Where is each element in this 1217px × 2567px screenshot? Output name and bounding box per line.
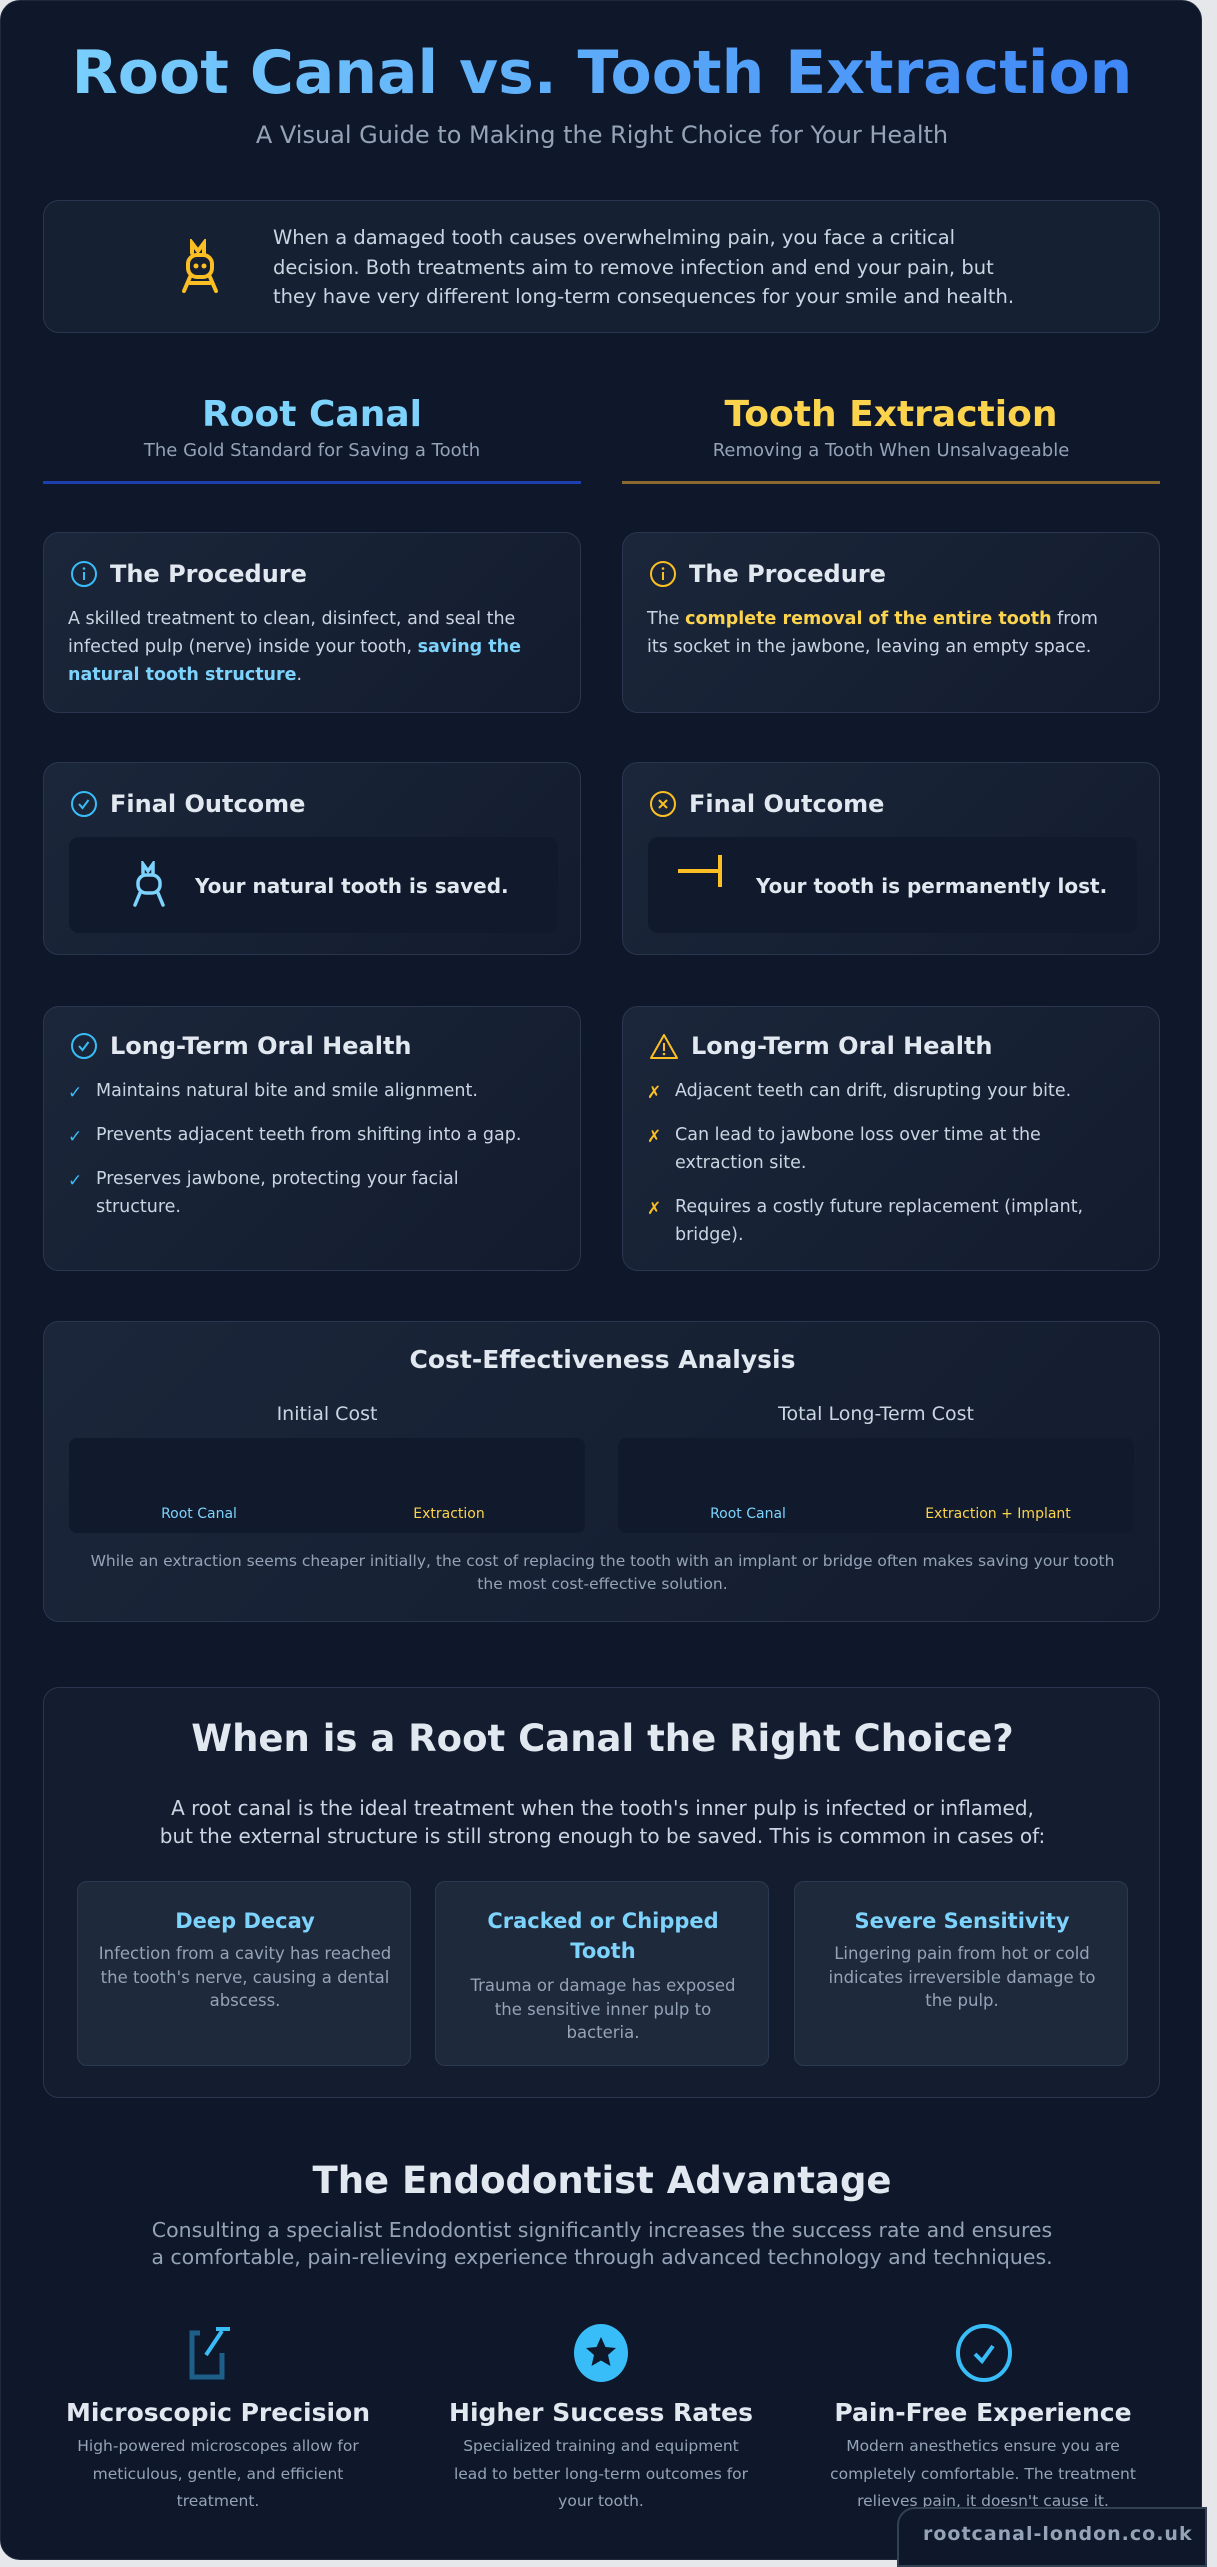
list: Prevents adjacent teeth from shifting into a gap. <box>96 1125 521 1145</box>
icon: lost tooth <box>678 855 722 887</box>
icon: microscope <box>190 2327 230 2380</box>
outcome box <box>69 837 558 933</box>
panel: extraction procedure <box>622 532 1160 713</box>
list <box>68 1081 521 1217</box>
heading: tooth extraction: Removing a Tooth When Unsalvageable <box>713 440 1069 461</box>
heading: root canal: The Gold Standard for Saving a Tooth <box>144 440 480 461</box>
case: cracked tooth: Trauma or damage has exposed the sensitive inner pulp to bacteria. <box>470 1976 736 2042</box>
chart: initial cost: Initial Cost <box>277 1403 377 1425</box>
chart: long-term cost: Total Long-Term Cost <box>778 1403 974 1425</box>
feature: pain-free: completely comfortable. The treatment <box>830 2464 1136 2482</box>
list: ✗ <box>647 1199 661 1219</box>
footer: site url <box>897 2507 1207 2567</box>
case: sensitivity <box>794 1881 1128 2066</box>
feature: higher success: Higher Success Rates <box>449 2398 753 2427</box>
feature: microscopic precision: High-powered microscopes allow for <box>77 2437 359 2455</box>
heading: When is a Root Canal the Right Choice? <box>191 1717 1014 1760</box>
note: the most cost-effective solution. <box>477 1575 728 1593</box>
feature: microscopic precision: Microscopic Precision <box>66 2398 370 2427</box>
feature: microscopic precision: treatment. <box>177 2492 259 2510</box>
panel: root canal outcome <box>43 762 581 955</box>
feature: higher success: lead to better long-term outcomes for <box>454 2464 748 2482</box>
endodontist text: Consulting a specialist Endodontist significantly increases the success rate and ensures <box>152 2218 1052 2242</box>
heading: endodontist advantage: The Endodontist Advantage <box>312 2159 892 2202</box>
heading: root canal <box>144 394 480 461</box>
list: ✓ <box>68 1127 82 1147</box>
note: While an extraction seems cheaper initially, the cost of replacing the tooth with an implant or bridge often makes saving your tooth <box>91 1552 1114 1570</box>
feature: microscopic precision: meticulous, gentle, and efficient <box>93 2464 343 2482</box>
heading: The Procedure <box>110 560 307 588</box>
footer: site url: rootcanal-london.co.uk <box>923 2523 1193 2545</box>
list: ✓ <box>68 1171 82 1191</box>
intro text <box>273 226 1014 308</box>
list: ✗ <box>647 1127 661 1147</box>
text: A skilled treatment to clean, disinfect, and seal the infected pulp (nerve) inside your tooth, saving the natural tooth structure. <box>68 609 521 685</box>
feature: higher success <box>449 2324 753 2510</box>
heading: Long-Term Oral Health <box>691 1032 992 1060</box>
intro panel <box>43 200 1160 333</box>
heading: root canal: Root Canal <box>202 394 422 435</box>
feature: pain-free: relieves pain, it doesn't cause it. <box>857 2492 1109 2510</box>
list: Adjacent teeth can drift, disrupting your bite. <box>675 1081 1071 1101</box>
feature: pain-free: Pain-Free Experience <box>834 2398 1132 2427</box>
case: sensitivity: Lingering pain from hot or cold indicates irreversible damage to the pulp. <box>829 1944 1095 2010</box>
panel: extraction long-term <box>622 1006 1160 1271</box>
feature: pain-free: Modern anesthetics ensure you are <box>846 2437 1120 2455</box>
feature: higher success: Specialized training and equipment <box>463 2437 739 2455</box>
case: deep decay <box>77 1881 411 2066</box>
case: deep decay: Deep Decay <box>175 1909 315 1933</box>
list: Maintains natural bite and smile alignment. <box>96 1081 478 1101</box>
intro text: When a damaged tooth causes overwhelming pain, you face a critical <box>273 226 955 249</box>
case: cracked tooth: Cracked or Chipped Tooth <box>487 1909 719 1963</box>
icon: check circle <box>956 2324 1012 2382</box>
outcome box: Your natural tooth is saved. <box>195 874 509 898</box>
title: Root Canal vs. Tooth Extraction <box>72 38 1132 108</box>
heading: tooth extraction <box>713 394 1069 461</box>
chart: initial cost: Extraction <box>413 1506 485 1522</box>
icon: tooth <box>133 861 165 907</box>
endodontist text: a comfortable, pain-relieving experience through advanced technology and techniques. <box>151 2245 1053 2269</box>
heading: Final Outcome <box>689 790 884 818</box>
feature: higher success: your tooth. <box>558 2492 644 2510</box>
icon: tooth <box>182 239 218 294</box>
intro text <box>160 1796 1045 1848</box>
heading: tooth extraction: Tooth Extraction <box>725 394 1057 435</box>
intro text: but the external structure is still strong enough to be saved. This is common in cases of: <box>160 1824 1045 1848</box>
case: cracked tooth <box>435 1881 769 2066</box>
chart: long-term cost: Root Canal <box>710 1506 786 1522</box>
outcome box <box>648 837 1137 933</box>
icon: star badge <box>574 2324 628 2382</box>
chart: initial cost: Root Canal <box>161 1506 237 1522</box>
list <box>647 1081 1083 1245</box>
panel: root canal procedure <box>43 532 581 713</box>
chart: long-term cost <box>618 1403 1071 1529</box>
chart: initial cost <box>69 1403 585 1533</box>
chart: long-term cost: Extraction + Implant <box>925 1506 1071 1522</box>
feature: pain-free <box>830 2324 1136 2510</box>
heading: The Procedure <box>689 560 886 588</box>
list: Can lead to jawbone loss over time at the extraction site. <box>675 1125 1041 1173</box>
heading: Final Outcome <box>110 790 305 818</box>
endodontist text <box>151 2218 1053 2269</box>
case: deep decay: Infection from a cavity has reached the tooth's nerve, causing a dental abscess. <box>99 1944 391 2010</box>
text: The complete removal of the entire tooth from its socket in the jawbone, leaving an empty space. <box>647 609 1098 657</box>
list: Requires a costly future replacement (implant, bridge). <box>675 1197 1083 1245</box>
case: sensitivity: Severe Sensitivity <box>854 1909 1070 1933</box>
panel: extraction outcome <box>622 762 1160 955</box>
intro text: decision. Both treatments aim to remove infection and end your pain, but <box>273 256 994 278</box>
outcome box: Your tooth is permanently lost. <box>756 874 1107 898</box>
heading: Cost-Effectiveness Analysis <box>409 1345 796 1374</box>
subtitle: A Visual Guide to Making the Right Choice for Your Health <box>256 121 948 149</box>
note <box>91 1552 1114 1593</box>
intro text: A root canal is the ideal treatment when the tooth's inner pulp is infected or inflamed, <box>171 1796 1034 1820</box>
panel: root canal long-term <box>43 1006 581 1271</box>
heading: Long-Term Oral Health <box>110 1032 412 1060</box>
feature: microscopic precision <box>66 2327 370 2510</box>
list: ✓ <box>68 1083 82 1103</box>
list: Preserves jawbone, protecting your facial structure. <box>96 1169 459 1217</box>
panel: when is root canal right <box>43 1687 1160 2098</box>
list: ✗ <box>647 1083 661 1103</box>
intro text: they have very different long-term consequences for your smile and health. <box>273 285 1014 308</box>
panel: cost analysis <box>43 1321 1160 1622</box>
